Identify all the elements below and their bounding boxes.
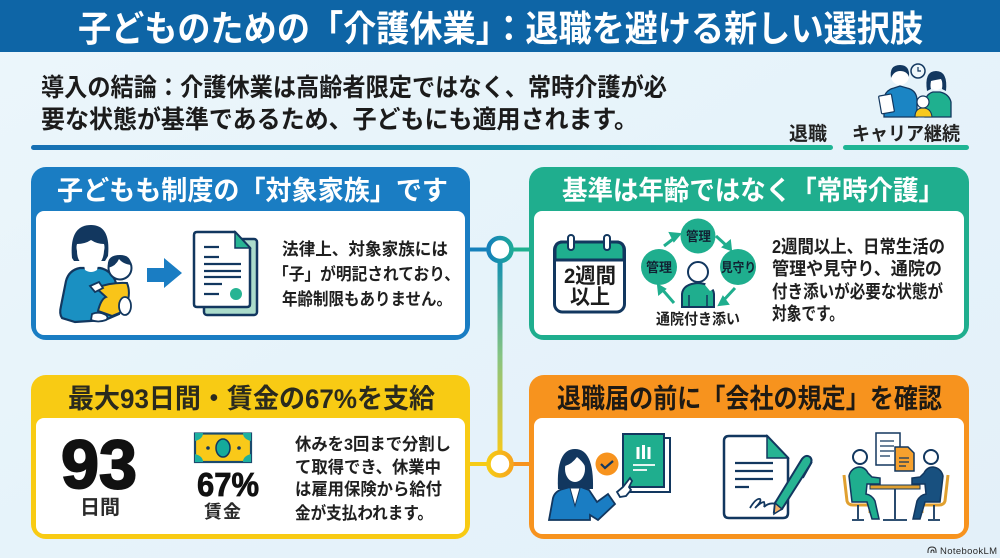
divider bar: retirement xyxy=(31,145,833,150)
panel heading: 最大93日間・賃金の67%を支給 xyxy=(68,384,435,414)
stat: 93 days: 日間 xyxy=(80,497,120,519)
panel heading: 子どもも制度の「対象家族」です xyxy=(57,176,448,206)
care cycle diagram: 見守り xyxy=(721,260,756,275)
panel body text: 休みを3回まで分割し xyxy=(295,435,451,454)
divider bar: career xyxy=(843,145,969,150)
panel body text: 金が支払われます。 xyxy=(295,503,433,523)
panel body text xyxy=(295,435,451,523)
care cycle diagram: 管理 xyxy=(646,260,672,275)
stat: 67 percent wages: 67% xyxy=(197,466,259,503)
stat: 67 percent wages xyxy=(197,466,259,522)
icon: signed document with pen xyxy=(724,436,812,518)
label: career continuation: キャリア継続 xyxy=(852,123,960,145)
connector lines xyxy=(470,238,530,476)
icon: banknote xyxy=(195,433,251,462)
care cycle diagram: 管理 xyxy=(686,229,711,244)
panel: 93 days and 67 percent xyxy=(31,375,470,539)
icon: family with clock xyxy=(879,64,951,117)
panel body text: て取得でき、休業中 xyxy=(295,458,441,477)
icon: calendar 2 weeks: 以上 xyxy=(570,286,610,309)
stat: 93 days: 93 xyxy=(61,426,137,503)
intro conclusion text: 要な状態が基準であるため、子どもにも適用されます。 xyxy=(41,105,638,134)
panel body text: 対象です。 xyxy=(772,304,844,324)
panel body text: 「子」が明記されており、 xyxy=(273,264,460,284)
intro conclusion text: 導入の結論：介護休業は高齢者限定ではなく、常時介護が必 xyxy=(41,73,667,102)
icon: calendar 2 weeks: 2週間 xyxy=(564,265,616,288)
care cycle diagram xyxy=(641,218,756,328)
panel body text: 2週間以上、日常生活の xyxy=(772,237,945,257)
panel body text xyxy=(772,237,945,324)
stat: 67 percent wages: 賃金 xyxy=(204,502,241,522)
icon: meeting at table xyxy=(844,433,948,520)
panel: constant care criteria xyxy=(529,167,969,340)
label: retirement: 退職 xyxy=(789,123,827,145)
panel: check company rules xyxy=(529,375,969,539)
title banner: 子どものための「介護休業」：退職を避ける新しい選択肢 xyxy=(78,8,923,49)
arrow xyxy=(147,258,182,288)
panel body text xyxy=(273,239,460,309)
panel body text: 付き添いが必要な状態が xyxy=(772,281,943,302)
panel heading: 基準は年齢ではなく「常時介護」 xyxy=(562,176,944,206)
panel body text: は雇用保険から給付 xyxy=(295,480,442,499)
icon: calendar 2 weeks xyxy=(554,235,624,312)
icon: parent holding child xyxy=(60,225,132,322)
panel: covered family xyxy=(31,167,470,340)
panel heading: 退職届の前に「会社の規定」を確認 xyxy=(557,384,942,414)
care cycle diagram: 通院付き添い xyxy=(656,311,740,328)
intro conclusion text xyxy=(41,73,667,134)
NotebookLM watermark: NotebookLM xyxy=(940,546,997,557)
panel body text: 管理や見守り、通院の xyxy=(772,258,942,279)
icon: document xyxy=(194,232,257,315)
panel body text: 法律上、対象家族には xyxy=(282,239,448,259)
icon: woman pointing at handbook xyxy=(549,434,670,520)
panel body text: 年齢制限もありません。 xyxy=(282,289,452,309)
